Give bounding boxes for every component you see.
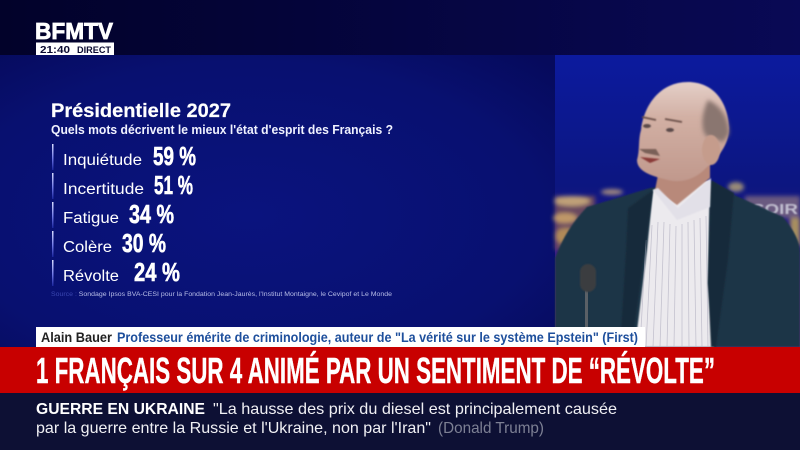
city lights	[553, 182, 800, 250]
photo: guest in studio	[553, 55, 800, 347]
logo: BFMTV: DIRECT	[77, 45, 111, 56]
top band	[0, 0, 800, 55]
ticker: (Donald Trump)	[438, 420, 544, 437]
head	[637, 82, 729, 181]
row: Incertitude: Incertitude	[63, 181, 144, 198]
row: Incertitude: 51 %	[154, 170, 193, 200]
strip: guest name and title: Alain Bauer	[41, 329, 112, 345]
source note: Source : Sondage Ipsos BVA-CESI pour la Fondation Jean-Jaurès, l'Institut Montaigne, le Cevipof et Le Monde	[51, 291, 392, 298]
row: Révolte	[52, 257, 180, 287]
studio background	[555, 55, 800, 347]
strip: guest name and title	[36, 327, 645, 347]
row: Révolte: 24 %	[134, 257, 180, 287]
chart: word list	[52, 141, 196, 287]
row: Colère: Colère	[63, 239, 112, 256]
row: Inquiétude	[52, 141, 196, 171]
row: Fatigue: 34 %	[129, 199, 174, 229]
collar	[653, 178, 711, 220]
ear	[702, 135, 720, 165]
logo: BFMTV: 21:40	[40, 44, 70, 56]
title: Présidentielle 2027	[51, 101, 231, 122]
ticker: "La hausse des prix du diesel est principalement causée	[213, 401, 617, 418]
right margin behind the photo	[555, 347, 800, 348]
row: Incertitude	[52, 170, 193, 200]
row: Colère: 30 %	[122, 228, 166, 258]
logo: BFMTV: BFMTV	[35, 18, 114, 44]
shirt	[635, 180, 714, 347]
row: Fatigue: Fatigue	[63, 210, 119, 227]
panel: survey background	[0, 55, 555, 347]
jacket	[555, 182, 800, 347]
ticker: GUERRE EN UKRAINE	[36, 401, 205, 418]
row: Fatigue	[52, 199, 174, 229]
microphone	[580, 264, 596, 338]
eyes, moustache and mouth	[639, 117, 682, 163]
strip: guest name and title: Professeur émérite de criminologie, auteur de "La vérité sur le système Epstein" (First)	[117, 329, 638, 345]
row: Révolte: Révolte	[63, 268, 119, 285]
row: Colère	[52, 228, 166, 258]
lapels	[620, 190, 653, 347]
shirt stripes	[640, 216, 708, 347]
subtitle: Quels mots décrivent le mieux l'état d'esprit des Français ?	[51, 123, 393, 137]
logo: BFMTV	[35, 18, 114, 56]
row: Inquiétude: Inquiétude	[63, 152, 142, 169]
ticker	[0, 393, 800, 450]
hair	[702, 100, 729, 142]
neck	[655, 160, 710, 205]
ticker: par la guerre entre la Russie et l'Ukraine, non par l'Iran"	[36, 420, 431, 437]
studio sign: SOIR	[752, 201, 798, 218]
row: Inquiétude: 59 %	[153, 141, 196, 171]
